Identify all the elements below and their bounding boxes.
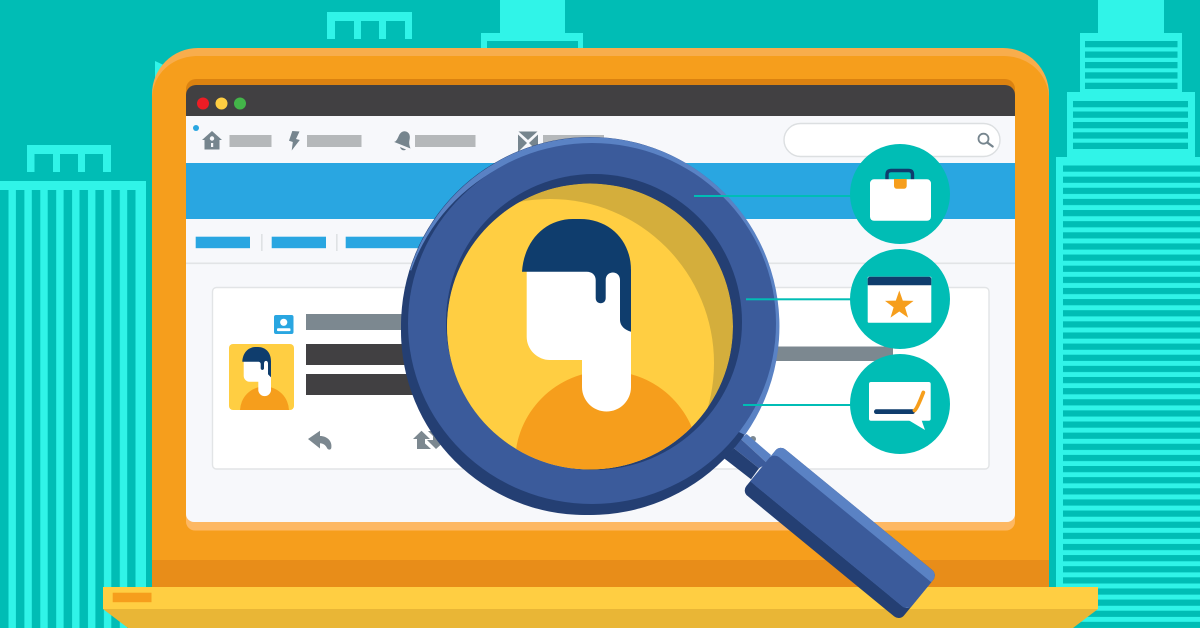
icon: retweet xyxy=(413,431,446,449)
avatar xyxy=(229,344,294,410)
icon: envelope xyxy=(518,132,538,152)
building: top centre crown xyxy=(327,12,412,39)
person body xyxy=(516,374,692,470)
icon: contact badge xyxy=(274,315,294,334)
icon circle: starred window xyxy=(850,249,950,349)
laptop screen xyxy=(186,79,1015,530)
building: left skyscraper xyxy=(0,145,146,628)
magnifying glass xyxy=(386,137,938,621)
building: top centre tower xyxy=(481,0,583,60)
icon circle: briefcase xyxy=(850,144,950,244)
icon: like dot xyxy=(750,436,756,442)
connector line: star xyxy=(746,298,852,300)
icon: reply xyxy=(308,431,331,450)
connector line: briefcase xyxy=(694,195,852,197)
browser page xyxy=(186,116,1015,522)
person hair xyxy=(522,219,631,332)
tabs xyxy=(196,234,431,251)
icon: lightning bolt xyxy=(289,131,300,150)
profile card xyxy=(212,288,989,469)
browser title bar xyxy=(186,85,1015,116)
name bar xyxy=(306,314,416,330)
icon: home xyxy=(202,131,222,150)
building: right skyscraper xyxy=(1056,0,1200,628)
magnifier outer ring xyxy=(401,137,779,515)
magnifier handle neck xyxy=(724,434,771,479)
blue header band xyxy=(186,163,1015,219)
building: small peak behind laptop xyxy=(155,61,168,82)
window control dots xyxy=(197,98,246,110)
laptop base xyxy=(103,587,1098,628)
magnifier lens with person xyxy=(447,184,733,470)
text bars xyxy=(306,344,416,395)
magnifier handle grip xyxy=(742,445,938,621)
navigation bar xyxy=(193,125,604,152)
icon: bell xyxy=(393,131,410,150)
icon: search xyxy=(978,134,993,146)
icon circle: writing speech bubble xyxy=(850,354,950,454)
search box xyxy=(784,124,1000,156)
laptop body xyxy=(152,48,1049,593)
connector line: writing xyxy=(743,404,852,406)
right grey bar xyxy=(760,346,893,361)
person face xyxy=(527,268,631,411)
